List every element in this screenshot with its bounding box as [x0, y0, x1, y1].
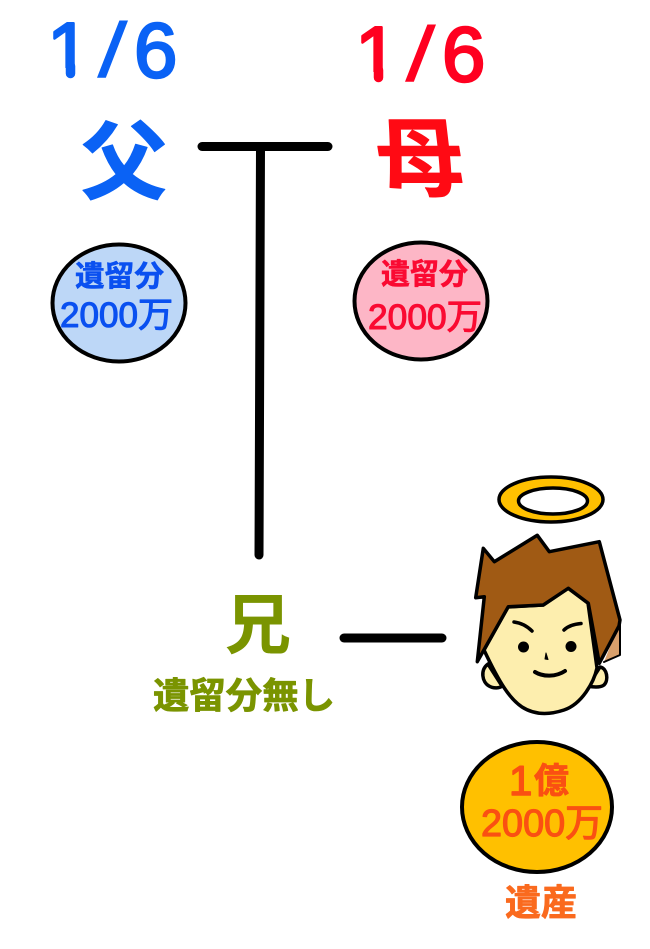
father share: /	[97, 6, 128, 94]
sibling connector line	[344, 634, 442, 642]
icon: deceased face	[476, 535, 620, 713]
father reserved portion circle: 遺留分	[75, 253, 164, 295]
estate circle: 2000万	[481, 803, 603, 845]
estate circle: 億	[534, 753, 569, 804]
father label: 父	[81, 92, 167, 217]
father share: 1	[47, 6, 90, 94]
brother label: 兄	[225, 572, 291, 668]
no reserved portion text: 遺留分無し	[153, 667, 335, 719]
icon: halo	[499, 477, 603, 522]
father reserved portion circle	[52, 244, 186, 362]
mother reserved portion circle: 2000万	[368, 298, 482, 337]
mother share	[361, 24, 484, 84]
mother share: 6	[442, 10, 485, 98]
father share: 6	[134, 6, 177, 94]
mother reserved portion circle: 遺留分	[381, 251, 468, 293]
father share	[53, 20, 176, 80]
parents connector line	[202, 146, 328, 555]
mother share: 1	[355, 10, 398, 98]
mother label: 母	[366, 90, 472, 214]
father reserved portion circle: 2000万	[60, 296, 173, 335]
mother reserved portion circle	[354, 242, 488, 360]
estate label: 遺産	[505, 874, 577, 926]
mother group	[354, 10, 488, 360]
estate circle	[462, 742, 612, 872]
mother share: /	[405, 10, 436, 98]
estate circle: 1	[509, 757, 532, 804]
father group	[47, 6, 186, 362]
brother group	[153, 572, 335, 719]
